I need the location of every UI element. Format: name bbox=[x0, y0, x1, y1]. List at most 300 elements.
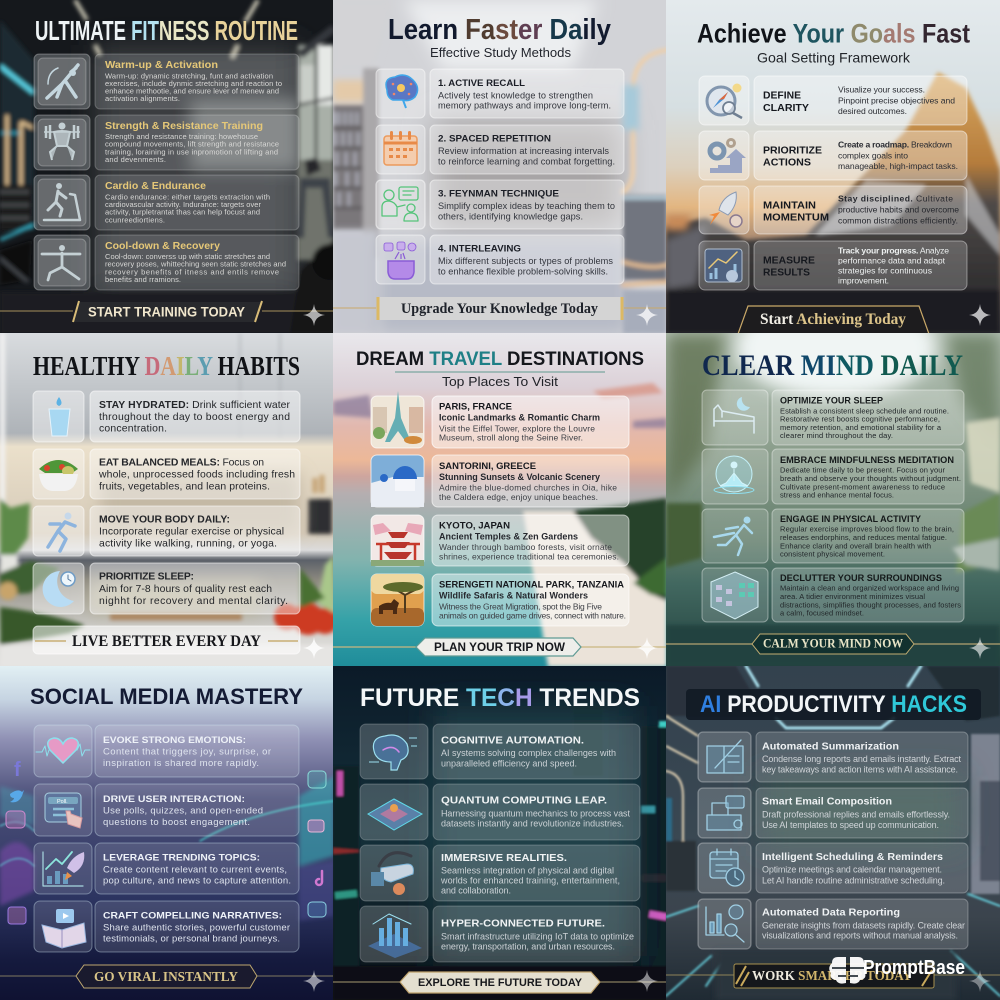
icon card: acacia and lion bbox=[371, 574, 424, 626]
text card: cool-down: benefits and rramions. bbox=[105, 275, 181, 284]
text card: email composition: Use AI templates to speed up communication. bbox=[762, 820, 939, 830]
icon card: mixing pot bbox=[376, 235, 425, 284]
icon card: open book bbox=[34, 901, 92, 952]
text card: paris: Iconic Landmarks & Romantic Charm bbox=[439, 413, 600, 423]
text card: scheduling: Intelligent Scheduling & Reminders bbox=[762, 851, 943, 863]
call to action: work smarter: WORK SMARTER TODAY bbox=[752, 968, 912, 983]
call to action: calm your mind: CALM YOUR MIND NOW bbox=[763, 636, 903, 650]
text card: prioritize sleep: Aim for 7-8 hours of quality rest each bbox=[99, 584, 272, 595]
text card: cool-down: recovery benefits of itness and entils remove bbox=[105, 267, 279, 276]
panel: Healthy Daily Habits bbox=[0, 333, 338, 667]
row: serengeti bbox=[371, 574, 629, 626]
text card: warm-up: activation alignments. bbox=[105, 94, 180, 103]
text card: spaced repetition: to reinforce learning and combat forgetting. bbox=[438, 156, 615, 166]
title: Achieve Your Goals Fast bbox=[697, 19, 970, 49]
icon card: book and pen bbox=[698, 732, 751, 782]
text card: warm-up: enhance methootie, and ensure lever of menew and bbox=[105, 86, 279, 96]
text card: data reporting bbox=[756, 899, 968, 949]
text card: declutter bbox=[772, 568, 964, 622]
text card: prioritize sleep: nighht for recovery and mental clarity. bbox=[99, 596, 288, 607]
text card: measure results: MEASURE bbox=[763, 254, 815, 266]
text card: summarization: Condense long reports and emails instantly. Extract bbox=[762, 754, 961, 764]
text card: compelling narratives bbox=[95, 901, 299, 952]
text card: measure results: strategies for continuous bbox=[838, 265, 932, 275]
text card: interleaving: to enhance flexible problem-solving skills. bbox=[438, 266, 608, 276]
icon: sparkle bbox=[636, 970, 658, 992]
icon: sparkle bbox=[636, 637, 658, 659]
text card: active recall bbox=[430, 69, 624, 118]
call to action: work smarter bbox=[666, 964, 1000, 988]
title: CLEAR MIND DAILY bbox=[702, 349, 963, 382]
text card: define clarity: CLARITY bbox=[763, 102, 809, 114]
title: DREAM TRAVEL DESTINATIONS bbox=[356, 349, 644, 370]
icon card: glowing brain bbox=[376, 69, 425, 118]
text card: mindfulness: EMBRACE MINDFULNESS MEDITATION bbox=[780, 455, 954, 465]
text card: serengeti: Witness the Great Migration, spot the Big Five bbox=[439, 601, 602, 611]
call to action: start training bbox=[0, 301, 334, 322]
text card: cool-down: recovery poses, whitteching seen static stretches and bbox=[105, 260, 286, 269]
text card: user interaction: questions to boost engagement. bbox=[103, 817, 250, 828]
text card: cool-down: Cool-down & Recovery bbox=[105, 241, 220, 252]
row: define clarity bbox=[699, 76, 967, 125]
row: mindfulness bbox=[702, 449, 964, 504]
icon card: calendar and clock bbox=[698, 843, 751, 893]
text card: strength: compound movements, lift strength and resistance bbox=[105, 140, 279, 149]
text card: santorini: the Caldera edge, enjoy unique beaches. bbox=[439, 492, 598, 502]
call to action: upgrade knowledge bbox=[333, 297, 667, 320]
text card: user interaction bbox=[95, 784, 299, 836]
icon card: flowing runner bbox=[702, 509, 768, 563]
text card: mindfulness: Dedicate time daily to be present. Focus on your bbox=[780, 466, 946, 475]
text card: strength: training, loraining in use inpromotion of lifting and bbox=[105, 147, 278, 156]
text card: scheduling: Let AI handle routine administrative scheduling. bbox=[762, 875, 945, 885]
text card: define clarity: DEFINE bbox=[763, 89, 801, 101]
text card: strength: Strength and resistance training: howehouse bbox=[105, 132, 258, 141]
call to action: upgrade knowledge: Upgrade Your Knowledge Today bbox=[401, 301, 599, 317]
text card: physical activity: Enhance clarity and overall brain health with bbox=[780, 541, 931, 550]
text card: cardio: activity, turpletrantat thas can help focust and bbox=[105, 208, 260, 217]
call to action: explore the future: EXPLORE THE FUTURE TODAY bbox=[418, 977, 583, 989]
text card: measure results: RESULTS bbox=[763, 267, 810, 279]
text card: mindfulness: Cultivate present-moment awareness to reduce bbox=[780, 482, 945, 491]
text card: eat balanced meals: fruits, vegetables, and lean proteins. bbox=[99, 481, 270, 492]
text card: cardio bbox=[95, 175, 299, 230]
text card: measure results: performance data and adapt bbox=[838, 255, 946, 265]
row: trending topics bbox=[34, 843, 299, 894]
row: cardio bbox=[34, 175, 299, 230]
text card: feynman technique: 3. FEYNMAN TECHNIQUE bbox=[438, 189, 559, 200]
row: interleaving bbox=[376, 235, 624, 284]
icon card: eiffel tower bbox=[371, 391, 424, 448]
background: tropical sunset bbox=[333, 333, 667, 667]
icon card: stretching figure bbox=[34, 54, 90, 109]
panel: Ultimate Fitness Routine bbox=[0, 0, 348, 334]
text card: hyper-connected: HYPER-CONNECTED FUTURE. bbox=[441, 918, 605, 930]
text card: summarization: Automated Summarization bbox=[762, 740, 899, 752]
row: summarization bbox=[698, 732, 968, 782]
call to action: plan your trip bbox=[333, 638, 667, 656]
text card: active recall: 1. ACTIVE RECALL bbox=[438, 78, 525, 89]
icon: sparkle bbox=[969, 637, 991, 659]
icon card: poll and cursor bbox=[34, 784, 92, 836]
text card: feynman technique: others, identifying knowledge gaps. bbox=[438, 211, 583, 221]
icon card: smart city bbox=[360, 906, 428, 962]
title banner: AI PRODUCTIVITY HACKS bbox=[700, 691, 967, 718]
icon card: VR headset bbox=[360, 845, 428, 901]
text card: interleaving: Mix different subjects or types of problems bbox=[438, 256, 613, 266]
icon: sparkle bbox=[969, 970, 991, 992]
text card: prioritize actions bbox=[754, 131, 967, 180]
text card: prioritize actions: Create a roadmap. Breakdown bbox=[838, 140, 952, 150]
icon: sparkle bbox=[303, 637, 325, 659]
text card: cognitive automation: unparalleled efficiency and speed. bbox=[441, 758, 577, 768]
icon card: poll and cursor: Poll. bbox=[57, 799, 68, 805]
text card: user interaction: Use polls, quizzes, and open-ended bbox=[103, 806, 263, 817]
row: data reporting bbox=[698, 899, 968, 949]
text card: interleaving bbox=[430, 235, 624, 284]
text card: eat balanced meals bbox=[90, 449, 300, 499]
text card: hyper-connected bbox=[433, 906, 640, 962]
background: library hall bbox=[333, 0, 667, 334]
text card: stay hydrated: STAY HYDRATED: Drink sufficient water bbox=[99, 400, 291, 411]
row: declutter bbox=[702, 568, 964, 622]
text card: define clarity: Pinpoint precise objectives and bbox=[838, 95, 955, 105]
subtitle: Effective Study Methods bbox=[430, 45, 571, 60]
text card: physical activity bbox=[772, 509, 964, 563]
call to action: calm your mind bbox=[666, 634, 1000, 654]
text card: data reporting: Automated Data Reporting bbox=[762, 907, 900, 919]
text card: cognitive automation bbox=[433, 724, 640, 779]
text card: cool-down bbox=[95, 235, 299, 290]
panel: Learn Faster Daily bbox=[333, 0, 667, 334]
title: SOCIAL MEDIA MASTERY bbox=[30, 684, 303, 709]
row: santorini bbox=[371, 455, 629, 507]
icon card: water glass bbox=[33, 391, 84, 442]
text card: cool-down: Cool-down: converss up with static stretches and bbox=[105, 252, 270, 261]
icon card: heart pulse bbox=[34, 725, 92, 777]
text card: santorini: SANTORINI, GREECE bbox=[439, 461, 536, 472]
row: scheduling bbox=[698, 843, 968, 893]
row: prioritize sleep bbox=[33, 563, 300, 614]
text card: immersive realities: and collaboration. bbox=[441, 886, 511, 896]
text card: warm-up bbox=[95, 54, 299, 109]
icon card: treadmill runner bbox=[34, 175, 90, 230]
watermark: PromptBase bbox=[829, 957, 965, 984]
text card: move your body bbox=[90, 506, 300, 556]
icon card: dashboard chart bbox=[699, 241, 749, 290]
text card: feynman technique: Simplify complex ideas by teaching them to bbox=[438, 201, 615, 211]
text card: evoke emotions: Content that triggers joy, surprise, or bbox=[103, 747, 271, 758]
icon card: warrior pose bbox=[34, 235, 90, 290]
call to action: plan your trip: PLAN YOUR TRIP NOW bbox=[434, 640, 566, 654]
text card: kyoto: KYOTO, JAPAN bbox=[439, 520, 510, 531]
text card: declutter: a calm, focused mindset. bbox=[780, 609, 864, 618]
row: prioritize actions bbox=[699, 131, 967, 180]
text card: spaced repetition: Review information at increasing intervals bbox=[438, 146, 609, 156]
row: active recall bbox=[376, 69, 624, 118]
text card: interleaving: 4. INTERLEAVING bbox=[438, 244, 521, 255]
text card: move your body: MOVE YOUR BODY DAILY: bbox=[99, 514, 230, 525]
text card: eat balanced meals: EAT BALANCED MEALS: Focus on bbox=[99, 457, 264, 468]
text card: trending topics: pop culture, and news to capture attention. bbox=[103, 876, 291, 887]
background: neon data waves bbox=[0, 666, 334, 1000]
text card: email composition: Draft professional replies and emails effortlessly. bbox=[762, 809, 950, 819]
row: stay hydrated bbox=[33, 391, 300, 442]
icon: brain logo bbox=[829, 957, 867, 984]
row: warm-up bbox=[34, 54, 299, 109]
text card: santorini: Admire the blue-domed churches in Oia, hike bbox=[439, 483, 617, 493]
text card: compelling narratives: CRAFT COMPELLING NARRATIVES: bbox=[103, 911, 282, 922]
row: physical activity bbox=[702, 509, 964, 563]
text card: prioritize sleep bbox=[90, 563, 300, 614]
text card: cognitive automation: AI systems solving complex challenges with bbox=[441, 748, 616, 758]
row: cool-down bbox=[34, 235, 299, 290]
text card: kyoto: Ancient Temples & Zen Gardens bbox=[439, 531, 578, 541]
text card: cardio: ccunreediortiens. bbox=[105, 215, 165, 224]
row: hyper-connected bbox=[360, 906, 640, 962]
text card: immersive realities: Seamless integration of physical and digital bbox=[441, 865, 614, 875]
row: eat balanced meals bbox=[33, 449, 300, 499]
text card: stay hydrated: concentration. bbox=[99, 424, 167, 435]
text card: email composition bbox=[756, 788, 968, 838]
text card: santorini: Stunning Sunsets & Volcanic Scenery bbox=[439, 472, 600, 482]
icon card: runner bbox=[33, 506, 84, 556]
text card: measure results: improvement. bbox=[838, 275, 889, 285]
text card: spaced repetition: 2. SPACED REPETITION bbox=[438, 134, 551, 145]
row: evoke emotions bbox=[34, 725, 299, 777]
background: futuristic office bbox=[666, 666, 1000, 1000]
text card: quantum computing: QUANTUM COMPUTING LEAP. bbox=[441, 795, 607, 807]
text card: summarization: key takeaways and action items with AI assistance. bbox=[762, 764, 958, 774]
call to action: start achieving bbox=[738, 306, 929, 334]
icon card: folder and chat bbox=[698, 788, 751, 838]
text card: paris bbox=[432, 396, 629, 448]
text card: prioritize sleep: PRIORITIZE SLEEP: bbox=[99, 572, 194, 583]
row: optimize sleep bbox=[702, 390, 964, 445]
text card: maintain momentum: Stay disciplined. Cultivate bbox=[838, 194, 953, 204]
row: maintain momentum bbox=[699, 186, 967, 234]
text card: hyper-connected: Smart infrastructure utilizing IoT data to optimize bbox=[441, 931, 634, 941]
text card: maintain momentum: common distractions efficiently. bbox=[838, 215, 958, 225]
text card: move your body: activity like walking, running, or yoga. bbox=[99, 539, 277, 550]
row: user interaction bbox=[34, 784, 299, 836]
title: FUTURE TECH TRENDS bbox=[360, 684, 640, 712]
call to action: live better: LIVE BETTER EVERY DAY bbox=[72, 633, 261, 650]
text card: stay hydrated bbox=[90, 391, 300, 442]
icon card: organised cubes bbox=[702, 568, 768, 622]
text card: evoke emotions bbox=[95, 725, 299, 777]
row: compelling narratives bbox=[34, 901, 299, 952]
icon card: salad bowl bbox=[33, 449, 84, 499]
icon card: rocket and stopwatch bbox=[699, 186, 749, 234]
text card: warm-up: exercises, include dynmic stretching and reaction to bbox=[105, 79, 282, 88]
icon card: bed and moon bbox=[702, 390, 768, 445]
text card: feynman technique bbox=[430, 180, 624, 229]
social icons: f bbox=[14, 759, 21, 781]
row: email composition bbox=[698, 788, 968, 838]
row: strength bbox=[34, 115, 299, 170]
text card: strength: Strength & Resistance Training bbox=[105, 121, 263, 132]
row: kyoto bbox=[371, 515, 629, 566]
call to action: live better bbox=[33, 626, 300, 654]
text card: stay hydrated: throughout the day to boost energy and bbox=[99, 412, 290, 423]
text card: trending topics: Create content relevant to current events, bbox=[103, 864, 287, 875]
background: mountain at sunset bbox=[666, 0, 1000, 334]
text card: serengeti: animals on guided game drives, connect with nature. bbox=[439, 610, 626, 620]
text card: mindfulness: stress and enhance mental focus. bbox=[780, 490, 894, 499]
text card: cognitive automation: COGNITIVE AUTOMATION. bbox=[441, 734, 584, 746]
text card: kyoto: shrines, experience traditional tea ceremonies. bbox=[439, 551, 619, 561]
icon card: quantum chip bbox=[360, 784, 428, 840]
icon card: teacher and student bbox=[376, 180, 425, 229]
text card: immersive realities bbox=[433, 845, 640, 901]
text card: measure results bbox=[754, 241, 967, 290]
call to action: go viral bbox=[0, 965, 334, 988]
text card: active recall: memory pathways and improve long-term. bbox=[438, 101, 611, 111]
text card: paris: Visit the Eiffel Tower, explore the Louvre bbox=[439, 423, 595, 433]
call to action: start training: START TRAINING TODAY bbox=[88, 304, 245, 320]
background: cyberpunk city bbox=[333, 666, 668, 1000]
text card: physical activity: Regular exercise improves blood flow to the brain, bbox=[780, 525, 954, 534]
row: paris bbox=[371, 391, 629, 448]
row: immersive realities bbox=[360, 845, 640, 901]
text card: paris: PARIS, FRANCE bbox=[439, 402, 512, 413]
text card: scheduling bbox=[756, 843, 968, 893]
text card: prioritize actions: complex goals into bbox=[838, 150, 908, 160]
icon card: pagoda and torii bbox=[371, 515, 424, 566]
text card: optimize sleep: memory retention, and emotional stability for a bbox=[780, 423, 942, 432]
text card: quantum computing bbox=[433, 784, 640, 840]
text card: prioritize actions: ACTIONS bbox=[763, 157, 811, 169]
row: measure results bbox=[699, 241, 967, 290]
row: spaced repetition bbox=[376, 125, 624, 174]
subtitle: Top Places To Visit bbox=[442, 374, 558, 389]
text card: measure results: Track your progress. Analyze bbox=[838, 245, 949, 255]
text card: maintain momentum bbox=[754, 186, 967, 234]
text card: quantum computing: datasets instantly and revolutionize industries. bbox=[441, 819, 624, 829]
background: kitchen bbox=[0, 333, 338, 667]
text card: serengeti: Wildlife Safaris & Natural Wonders bbox=[439, 590, 588, 600]
text card: paris: Museum, stroll along the Seine River. bbox=[439, 433, 583, 443]
row: move your body bbox=[33, 506, 300, 556]
background: forest lake bbox=[666, 298, 1000, 667]
text card: optimize sleep: OPTIMIZE YOUR SLEEP bbox=[780, 396, 883, 406]
text card: strength bbox=[95, 115, 299, 170]
text card: prioritize actions: PRIORITIZE bbox=[763, 144, 822, 156]
panel: Social Media Mastery bbox=[0, 666, 334, 1000]
text card: warm-up: Warm-up & Activation bbox=[105, 60, 218, 71]
text card: hyper-connected: energy, transportation, and urban resources. bbox=[441, 942, 615, 952]
icon card: calendar bbox=[376, 125, 425, 174]
text card: compelling narratives: Share authentic stories, powerful customer bbox=[103, 922, 290, 933]
text card: maintain momentum: productive habits and overcome bbox=[838, 204, 959, 214]
text card: cardio: Cardio & Endurance bbox=[105, 181, 206, 192]
text card: compelling narratives: testimonials, or personal brand journeys. bbox=[103, 933, 280, 944]
text card: declutter: area. A tidier environment minimizes visual bbox=[780, 592, 925, 601]
text card: user interaction: DRIVE USER INTERACTION: bbox=[103, 794, 245, 805]
icon card: growth chart and rocket bbox=[34, 843, 92, 894]
underline bbox=[395, 371, 605, 373]
text card: optimize sleep bbox=[772, 390, 964, 445]
text card: eat balanced meals: whole, unprocessed foods including fresh bbox=[98, 469, 295, 480]
text card: serengeti: SERENGETI NATIONAL PARK, TANZANIA bbox=[439, 580, 624, 591]
text card: quantum computing: Harnessing quantum mechanics to process vast bbox=[441, 808, 630, 818]
title: HEALTHY DAILY HABITS bbox=[33, 351, 300, 381]
icon card: neural brain bbox=[360, 724, 428, 779]
text card: cardio: cardiovascular activity. Indurance: targets over bbox=[105, 200, 262, 209]
text card: email composition: Smart Email Composition bbox=[762, 796, 892, 808]
row: feynman technique bbox=[376, 180, 624, 229]
text card: evoke emotions: inspiration is shared more rapidly. bbox=[103, 758, 259, 769]
panel: Clear Mind Daily bbox=[666, 298, 1000, 667]
icon card: chart and magnifier bbox=[698, 899, 751, 949]
text card: define clarity: Visualize your success. bbox=[838, 85, 925, 95]
text card: immersive realities: IMMERSIVE REALITIES. bbox=[441, 852, 567, 864]
icon card: squat with barbell bbox=[34, 115, 90, 170]
text card: move your body: Incorporate regular exercise or physical bbox=[99, 527, 284, 538]
icon: sparkle bbox=[969, 304, 991, 326]
text card: spaced repetition bbox=[430, 125, 624, 174]
subtitle: Goal Setting Framework bbox=[757, 50, 911, 66]
text card: mindfulness: breath and observe your thoughts without judgment. bbox=[780, 474, 961, 483]
social icons bbox=[6, 759, 326, 924]
text card: kyoto: Wander through bamboo forests, visit ornate bbox=[439, 542, 612, 552]
text card: maintain momentum: MAINTAIN bbox=[763, 199, 816, 211]
text card: physical activity: ENGAGE IN PHYSICAL ACTIVITY bbox=[780, 514, 921, 524]
watermark: PromptBase: PromptBase bbox=[863, 957, 965, 979]
icon: sparkle bbox=[303, 970, 325, 992]
panel: Future Tech Trends bbox=[333, 666, 668, 1000]
row: cognitive automation bbox=[360, 724, 640, 779]
call to action: explore the future bbox=[333, 972, 667, 993]
text card: serengeti bbox=[432, 574, 629, 626]
panel: Dream Travel Destinations bbox=[333, 333, 667, 667]
title: Learn Faster Daily bbox=[388, 14, 611, 46]
text card: data reporting: Generate insights from datasets rapidly. Create clear bbox=[762, 920, 965, 930]
text card: active recall: Actively test knowledge to strengthen bbox=[438, 90, 593, 100]
text card: scheduling: Optimize meetings and calendar management. bbox=[762, 865, 942, 875]
text card: define clarity bbox=[754, 76, 967, 125]
text card: declutter: distractions, simplifies thought processes, and fosters bbox=[780, 600, 961, 609]
text card: optimize sleep: Establish a consistent sleep schedule and routine. bbox=[780, 406, 949, 415]
text card: optimize sleep: Restorative rest boosts cognitive performance, bbox=[780, 415, 940, 424]
text card: define clarity: desired outcomes. bbox=[838, 106, 907, 116]
panel: AI Productivity Hacks bbox=[666, 666, 1000, 1000]
icon card: gears and arrow bbox=[699, 131, 749, 180]
row: quantum computing bbox=[360, 784, 640, 840]
text card: warm-up: Warm-up: dynamic stretching, funt and activation bbox=[105, 72, 273, 80]
text card: santorini bbox=[432, 455, 629, 507]
text card: trending topics: LEVERAGE TRENDING TOPICS: bbox=[103, 852, 260, 863]
title: ULTIMATE FITNESS ROUTINE bbox=[35, 15, 298, 46]
text card: mindfulness bbox=[772, 449, 964, 504]
icon card: compass and magnifier bbox=[699, 76, 749, 125]
background: gym bbox=[0, 0, 348, 334]
icon card: blue dome bbox=[371, 455, 424, 507]
text card: physical activity: releases endorphins, and reduces mental fatigue. bbox=[780, 533, 947, 542]
call to action: go viral: GO VIRAL INSTANTLY bbox=[94, 969, 238, 984]
call to action: start achieving: Start Achieving Today bbox=[760, 311, 906, 328]
text card: strength: and devenments. bbox=[105, 155, 166, 164]
text card: data reporting: visualizations and reports without manual analysis. bbox=[762, 931, 958, 941]
text card: declutter: Maintain a clean and organized workspace and living bbox=[780, 584, 959, 593]
text card: trending topics bbox=[95, 843, 299, 894]
icon: sparkle bbox=[636, 304, 658, 326]
icon: sparkle bbox=[303, 304, 325, 326]
text card: cardio: Cardio endurance: either targets extraction with bbox=[105, 192, 270, 201]
text card: immersive realities: worlds for enhanced training, entertainment, bbox=[440, 876, 620, 886]
text card: physical activity: consistent physical movement. bbox=[780, 549, 885, 558]
